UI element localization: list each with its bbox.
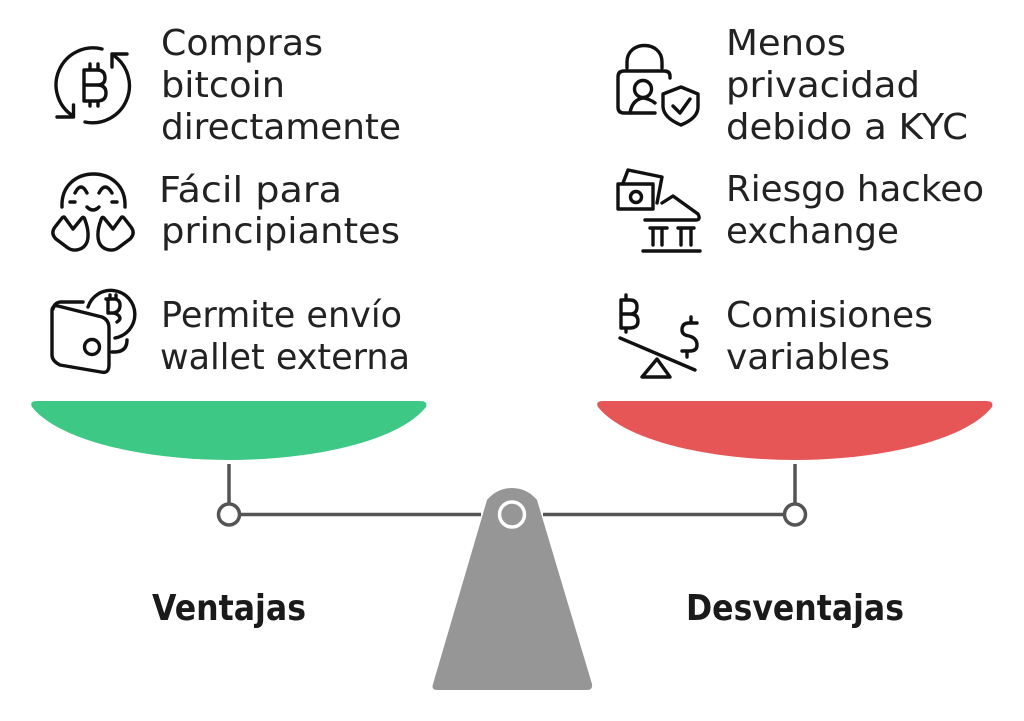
icon: banknotes and bank building (618, 170, 700, 251)
fulcrum (432, 488, 592, 690)
text block: ventaja 3 (160, 295, 410, 378)
text block: desventaja 1: debido a KYC (726, 107, 968, 148)
text block: desventaja 3 (726, 295, 933, 378)
text block: desventaja 2: Riesgo hackeo (726, 169, 984, 210)
text block: ventaja 2: Fácil para (159, 170, 342, 211)
heading: Desventajas: Desventajas (686, 588, 904, 629)
text block: ventaja 1: Compras (161, 23, 323, 64)
heading: Ventajas: Ventajas (152, 588, 306, 629)
text block: ventaja 1 (161, 23, 401, 148)
text block: ventaja 2 (159, 170, 400, 252)
text block: ventaja 2: principiantes (161, 211, 400, 252)
icon: bitcoin and dollar on a balance (620, 295, 697, 377)
text block: ventaja 1: bitcoin (161, 65, 285, 106)
red scale pan (597, 401, 992, 460)
text block: ventaja 3: Permite envío (161, 295, 402, 336)
icon: bitcoin exchange cycle (56, 48, 129, 123)
text block: desventaja 1: Menos (726, 23, 846, 64)
text block: desventaja 3: variables (726, 337, 890, 378)
text block: desventaja 1: privacidad (726, 65, 920, 106)
icon: wallet with bitcoin (52, 290, 135, 372)
balance beam (218, 464, 806, 525)
icon: padlock with user and shield (618, 46, 698, 125)
text block: desventaja 3: Comisiones (726, 295, 933, 336)
text block: ventaja 3: wallet externa (160, 337, 410, 378)
text block: ventaja 1: directamente (161, 107, 401, 148)
text block: desventaja 2 (726, 169, 984, 252)
green scale pan (31, 401, 426, 460)
text block: desventaja 1 (726, 23, 968, 148)
icon: happy face with hands (53, 174, 133, 250)
text block: desventaja 2: exchange (726, 211, 899, 252)
